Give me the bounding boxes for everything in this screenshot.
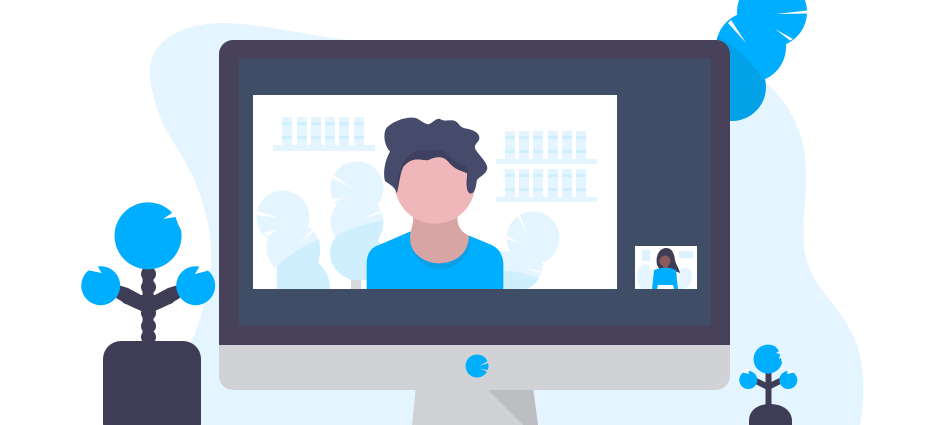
screen [239,59,711,325]
thumbnail plants [637,265,692,289]
pot [749,404,792,425]
shelf: upper right [496,131,597,164]
monitor stand [412,385,538,425]
foliage: right [779,370,797,389]
power button [466,354,488,378]
monitor chin [219,340,730,390]
background plant: center [330,162,384,289]
trunk [766,370,772,406]
foliage: left [739,369,757,389]
foliage: top [754,345,782,374]
hair [384,118,487,194]
main video frame [253,95,617,289]
background plant: left [256,190,330,289]
thumbnail shelves [642,250,693,261]
pot [103,341,201,425]
background plant: right [495,212,560,289]
face [395,143,475,224]
hair shadow [397,150,471,194]
foliage: top [115,202,182,269]
plant: small right [739,345,797,425]
trunk [351,279,361,289]
plant: left [81,202,215,425]
branches [754,380,782,387]
trunk [141,262,156,347]
shirt [367,232,503,289]
branches [116,285,180,311]
foliage: right [176,264,215,305]
plant: top right [716,0,807,121]
background blob [150,23,863,425]
person [367,118,503,289]
monitor [219,40,730,425]
collar [410,232,470,269]
thumbnail person [652,248,680,289]
stand shadow [488,390,538,425]
monitor bezel [219,40,730,345]
shelf: lower right [496,169,597,202]
neck [410,217,469,263]
shelf: top left [273,117,375,151]
foliage: left [81,264,120,305]
thumbnail video [635,246,697,289]
